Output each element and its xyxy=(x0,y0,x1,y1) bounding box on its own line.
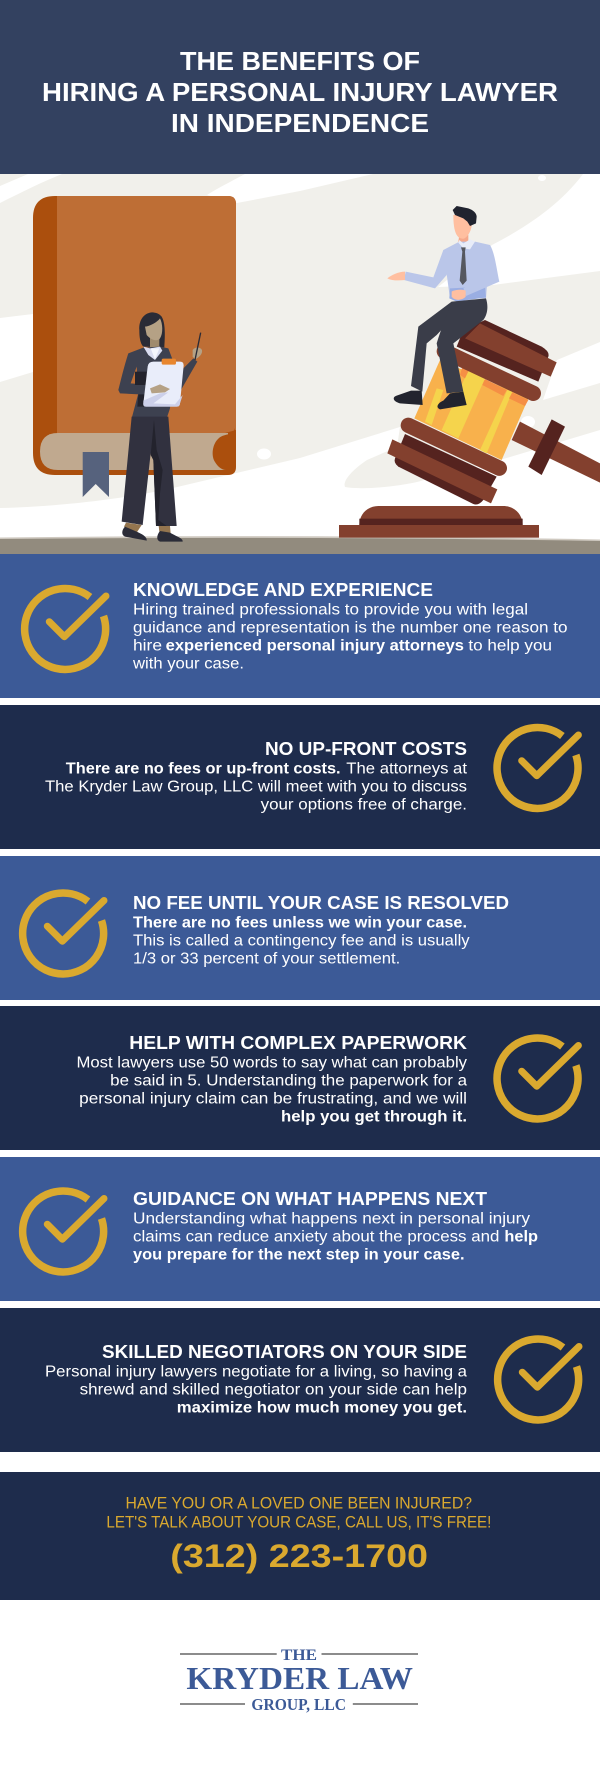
body text: shrewd and skilled negotiator on your side can help xyxy=(80,1381,467,1398)
heading: GUIDANCE ON WHAT HAPPENS NEXT xyxy=(133,1188,488,1209)
panel: knowledge and experience xyxy=(0,554,600,698)
call to action text xyxy=(106,1495,491,1532)
body text: to help you xyxy=(468,638,552,655)
body text: guidance and representation is the number one reason to xyxy=(133,620,568,637)
panel: help with complex paperwork xyxy=(0,1006,600,1150)
body text: you prepare for the next step in your case. xyxy=(133,1246,465,1263)
body text: The Kryder Law Group, LLC will meet with you to discuss xyxy=(45,778,467,795)
icon: check circle xyxy=(25,588,106,669)
header panel xyxy=(0,0,600,174)
panel: skilled negotiators xyxy=(0,1308,600,1452)
call to action text: HAVE YOU OR A LOVED ONE BEEN INJURED? xyxy=(126,1495,472,1513)
book xyxy=(33,196,236,497)
body text: claims can reduce anxiety about the process and xyxy=(133,1228,499,1245)
body text: This is called a contingency fee and is usually xyxy=(133,932,470,949)
body text xyxy=(45,1363,467,1416)
heading: KNOWLEDGE AND EXPERIENCE xyxy=(133,579,433,600)
body text: help you get through it. xyxy=(281,1108,467,1125)
body text: There are no fees or up-front costs. xyxy=(66,760,341,777)
body text: There are no fees unless we win your case. xyxy=(133,914,467,931)
panel: call to action xyxy=(0,1472,600,1600)
heading: NO UP-FRONT COSTS xyxy=(265,738,467,759)
body text: Personal injury lawyers negotiate for a living, so having a xyxy=(45,1363,467,1380)
bookmark xyxy=(83,452,109,497)
body text: your options free of charge. xyxy=(261,796,467,813)
woman with clipboard xyxy=(118,312,202,542)
logo: KRYDER LAW xyxy=(186,1660,413,1696)
body text: be said in 5. Understanding the paperwork for a xyxy=(110,1072,467,1089)
title: IN INDEPENDENCE xyxy=(171,108,429,138)
body text: maximize how much money you get. xyxy=(177,1399,467,1416)
heading: SKILLED NEGOTIATORS ON YOUR SIDE xyxy=(102,1341,467,1362)
body text: Most lawyers use 50 words to say what can probably xyxy=(76,1054,467,1071)
logo: GROUP, LLC xyxy=(251,1695,346,1714)
panel: no up-front costs xyxy=(0,705,600,849)
heading: NO FEE UNTIL YOUR CASE IS RESOLVED xyxy=(133,892,509,913)
body text xyxy=(133,1210,538,1263)
icon: check circle xyxy=(497,727,578,808)
body text: experienced personal injury attorneys xyxy=(166,638,464,655)
icon: check circle xyxy=(23,893,104,974)
body text: Hiring trained professionals to provide you with legal xyxy=(133,602,528,619)
ground xyxy=(0,536,600,554)
heading: HELP WITH COMPLEX PAPERWORK xyxy=(129,1032,468,1053)
gavel xyxy=(339,320,600,538)
body text: hire xyxy=(133,638,162,655)
man sitting on gavel xyxy=(387,206,499,409)
icon: check circle xyxy=(497,1038,578,1119)
body text: 1/3 or 33 percent of your settlement. xyxy=(133,950,400,967)
title: THE BENEFITS OF xyxy=(180,46,420,76)
body text: help xyxy=(504,1228,538,1245)
body text: with your case. xyxy=(132,656,244,673)
body text: Understanding what happens next in personal injury xyxy=(133,1210,530,1227)
logo xyxy=(180,1647,418,1714)
title: HIRING A PERSONAL INJURY LAWYER xyxy=(42,77,558,107)
panel: guidance on what happens next xyxy=(0,1157,600,1301)
body text xyxy=(45,760,468,813)
call to action text: LET'S TALK ABOUT YOUR CASE, CALL US, IT'S FREE! xyxy=(106,1514,491,1532)
body text xyxy=(132,602,568,673)
body text: personal injury claim can be frustrating, and we will xyxy=(79,1090,467,1107)
title xyxy=(42,46,558,138)
background shapes xyxy=(0,174,600,508)
body text xyxy=(76,1054,467,1125)
logo: THE xyxy=(281,1647,317,1664)
icon: check circle xyxy=(23,1191,104,1272)
phone number: (312) 223-1700 xyxy=(170,1538,428,1574)
body text xyxy=(133,914,470,967)
body text: The attorneys at xyxy=(346,760,468,777)
illustration panel xyxy=(0,174,600,554)
panel: no fee until resolved xyxy=(0,856,600,1000)
icon: check circle xyxy=(498,1339,579,1420)
